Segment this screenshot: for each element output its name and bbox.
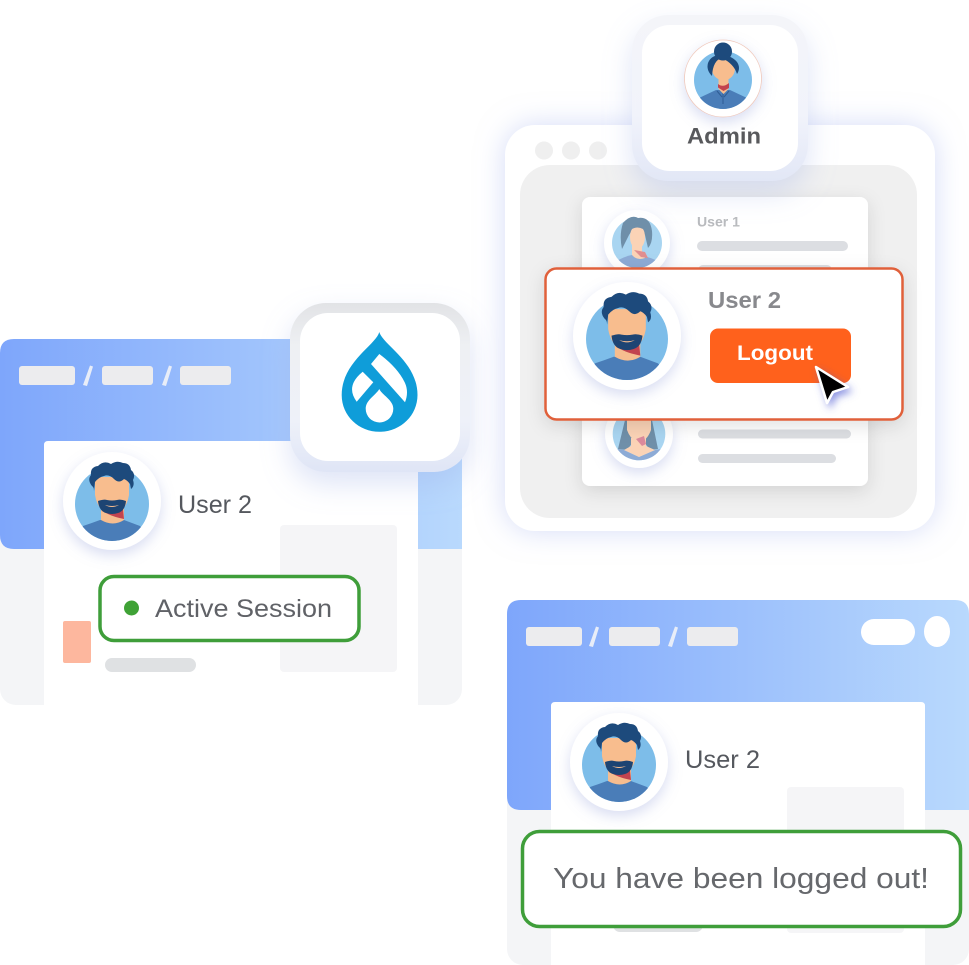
- header controls: [861, 616, 950, 647]
- user 1 label: User 1: [697, 214, 741, 230]
- placeholder bar: [613, 918, 703, 932]
- avatar: user 3: [605, 400, 673, 468]
- placeholder bar: [105, 658, 196, 672]
- user name: User 2: [685, 746, 760, 774]
- window dots: [535, 142, 607, 160]
- active session badge: [100, 576, 359, 640]
- admin label: Admin: [687, 124, 761, 148]
- user 1 bars: [697, 241, 848, 275]
- placeholder panel: [280, 525, 397, 672]
- user name: User 2: [708, 287, 781, 313]
- placeholder accent: [63, 621, 91, 663]
- content card: [44, 441, 418, 705]
- icon: Drupal logo tile: [290, 303, 470, 472]
- browser header: [0, 339, 462, 549]
- inner gray panel: [520, 165, 917, 518]
- user 3 bars: [698, 430, 851, 463]
- panel: admin window: [505, 125, 935, 531]
- avatar: user 2: [573, 282, 681, 390]
- logged out message: [522, 832, 960, 926]
- avatar: user 1: [604, 210, 670, 276]
- browser header: [507, 600, 969, 810]
- user list card: [582, 197, 868, 486]
- user name: User 2: [178, 491, 252, 519]
- icon: mouse cursor: [816, 367, 848, 403]
- panel: active session window: [0, 339, 462, 705]
- logged out message: You have been logged out!: [553, 863, 929, 895]
- placeholder panel: [787, 787, 904, 933]
- breadcrumb pills: [19, 366, 231, 386]
- avatar: user 2: [63, 452, 161, 550]
- avatar: admin: [684, 40, 762, 117]
- admin card: [632, 15, 808, 181]
- active session badge: Active Session: [155, 595, 332, 623]
- selected user card: [546, 268, 902, 420]
- panel: logged out window: [507, 600, 969, 965]
- logout button: [710, 328, 851, 383]
- breadcrumb pills: [526, 626, 738, 647]
- avatar: user 2: [570, 713, 668, 811]
- logout button: Logout: [737, 342, 813, 365]
- content card: [551, 702, 925, 965]
